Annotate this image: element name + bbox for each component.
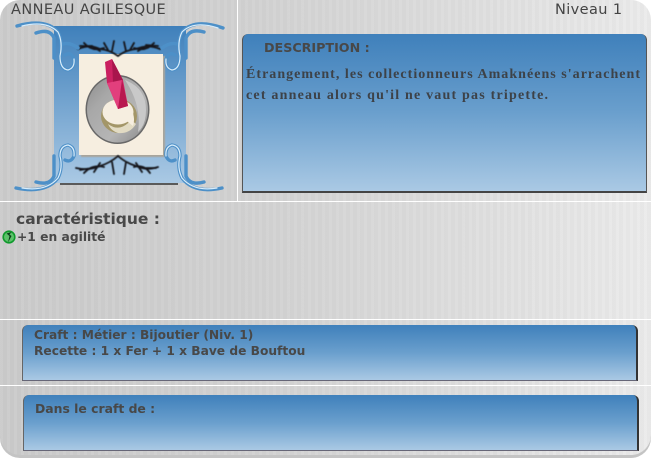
level: Niveau 1 [555, 2, 622, 18]
swirl corners [16, 23, 223, 190]
craft text: Recette : 1 x Fer + 1 x Bave de Bouftou [34, 344, 305, 358]
description heading: DESCRIPTION : [264, 40, 370, 55]
panel: used in craft [23, 395, 639, 451]
gem [105, 59, 128, 109]
craft text: Craft : Métier : Bijoutier (Niv. 1) [34, 328, 253, 342]
description text: cet anneau alors qu'il ne vaut pas tripette. [246, 88, 548, 103]
frame background [54, 26, 186, 183]
characteristics heading: caractéristique : [16, 210, 160, 228]
description text: Étrangement, les collectionneurs Amaknéens s'arrachent [246, 65, 640, 82]
used in craft text: Dans le craft de : [35, 401, 155, 416]
ring [86, 75, 150, 144]
characteristic value: +1 en agilité [17, 230, 105, 244]
panel: craft [22, 325, 638, 381]
icon: agility [2, 230, 16, 244]
description text [246, 65, 640, 103]
icon: ornate item frame with ring [14, 21, 225, 192]
panel: description [242, 34, 647, 193]
title: ANNEAU AGILESQUE [11, 2, 166, 18]
craft text [34, 328, 305, 358]
cream card [81, 56, 165, 157]
ornament: top tribal [78, 41, 160, 56]
ornament: bottom tribal [76, 156, 158, 174]
